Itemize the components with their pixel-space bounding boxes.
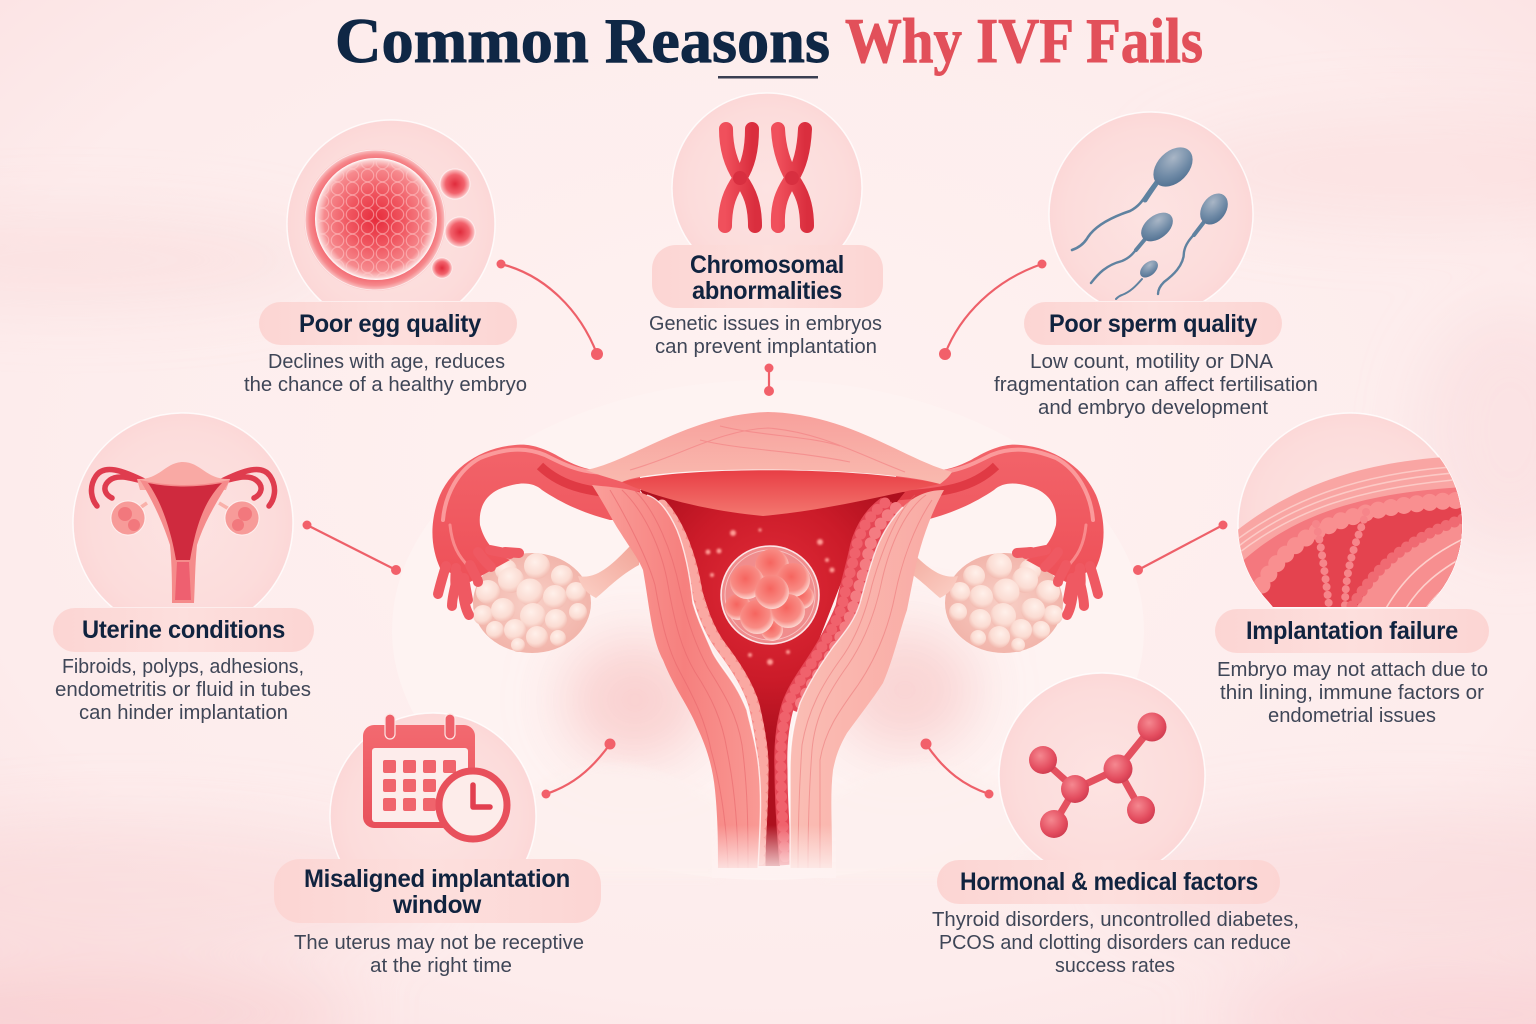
panel: misaligned implantation window: The uterus may not be receptive xyxy=(294,932,584,954)
connector: uterine xyxy=(302,520,401,575)
panel: uterine conditions: endometritis or fluid in tubes xyxy=(55,679,311,701)
connector: sperm xyxy=(939,260,1046,360)
sparkles xyxy=(706,528,834,665)
right uterine wall xyxy=(790,490,944,868)
uterine cavity xyxy=(640,490,905,866)
panel: misaligned implantation window: Misaligned implantation xyxy=(304,865,570,893)
panel: misaligned implantation window: at the right time xyxy=(370,955,512,977)
panel: misaligned implantation window: window xyxy=(392,891,482,919)
title: Why IVF Fails xyxy=(845,6,1203,76)
panel: misaligned implantation window xyxy=(274,713,601,977)
lower fade xyxy=(712,825,836,878)
right endometrium xyxy=(781,503,896,865)
title xyxy=(335,6,1203,78)
panel: poor sperm quality xyxy=(994,112,1318,419)
panel: chromosomal abnormalities: Chromosomal xyxy=(690,251,844,279)
fundus dome xyxy=(586,412,952,516)
panel: poor sperm quality: fragmentation can affect fertilisation xyxy=(994,374,1318,396)
icon: egg cell xyxy=(286,120,496,301)
panel: poor egg quality xyxy=(244,120,527,396)
panel: implantation failure xyxy=(1215,413,1489,727)
panel: chromosomal abnormalities: can prevent implantation xyxy=(655,336,877,358)
connector: implantation xyxy=(1133,520,1228,575)
panel: uterine conditions: can hinder implantation xyxy=(79,702,288,724)
icon: chromosomes xyxy=(672,92,862,245)
icon: endometrium section xyxy=(1235,413,1465,620)
panel: implantation failure: thin lining, immune factors or xyxy=(1220,682,1484,704)
panel: chromosomal abnormalities: abnormalities xyxy=(692,277,842,305)
panel: implantation failure: Implantation failure xyxy=(1246,617,1458,645)
icon: molecule xyxy=(999,673,1205,879)
uterus illustration xyxy=(432,412,1104,878)
left fallopian tube and ovary xyxy=(432,445,640,653)
panel: poor sperm quality: and embryo development xyxy=(1038,397,1268,419)
left uterine wall xyxy=(592,485,761,868)
panel: poor egg quality: Declines with age, reduces xyxy=(268,351,505,373)
icon: calendar and clock xyxy=(330,712,536,859)
panel: uterine conditions: Fibroids, polyps, adhesions, xyxy=(62,656,304,678)
panel: chromosomal abnormalities: Genetic issues in embryos xyxy=(649,313,882,335)
embryo xyxy=(721,546,819,644)
panel: hormonal and medical factors: Thyroid disorders, uncontrolled diabetes, xyxy=(932,909,1299,931)
title: Common Reasons xyxy=(335,6,830,76)
panel: implantation failure: endometrial issues xyxy=(1268,705,1436,727)
connector: hormones xyxy=(920,738,994,798)
panel: poor sperm quality: Low count, motility or DNA xyxy=(1030,351,1274,373)
panel: poor sperm quality: Poor sperm quality xyxy=(1049,310,1257,338)
right fallopian tube and ovary xyxy=(896,445,1104,653)
center halo xyxy=(392,380,1144,880)
connector: egg xyxy=(496,260,603,360)
panel: chromosomal abnormalities xyxy=(649,93,883,358)
panel: hormonal and medical factors xyxy=(932,673,1299,977)
icon: sperm xyxy=(1049,112,1253,316)
panel: hormonal and medical factors: Hormonal & medical factors xyxy=(960,868,1258,896)
panel: uterine conditions: Uterine conditions xyxy=(82,616,285,644)
icon: uterus xyxy=(72,412,294,607)
connector: chromosome xyxy=(764,364,774,396)
panel: uterine conditions xyxy=(53,413,314,724)
panel: hormonal and medical factors: PCOS and clotting disorders can reduce xyxy=(939,932,1291,954)
panel: poor egg quality: the chance of a healthy embryo xyxy=(244,374,527,396)
left endometrium xyxy=(662,505,763,866)
panel: poor egg quality: Poor egg quality xyxy=(299,310,481,338)
panel: hormonal and medical factors: success rates xyxy=(1055,955,1175,977)
connector: window xyxy=(542,738,616,798)
panel: implantation failure: Embryo may not attach due to xyxy=(1217,659,1488,681)
